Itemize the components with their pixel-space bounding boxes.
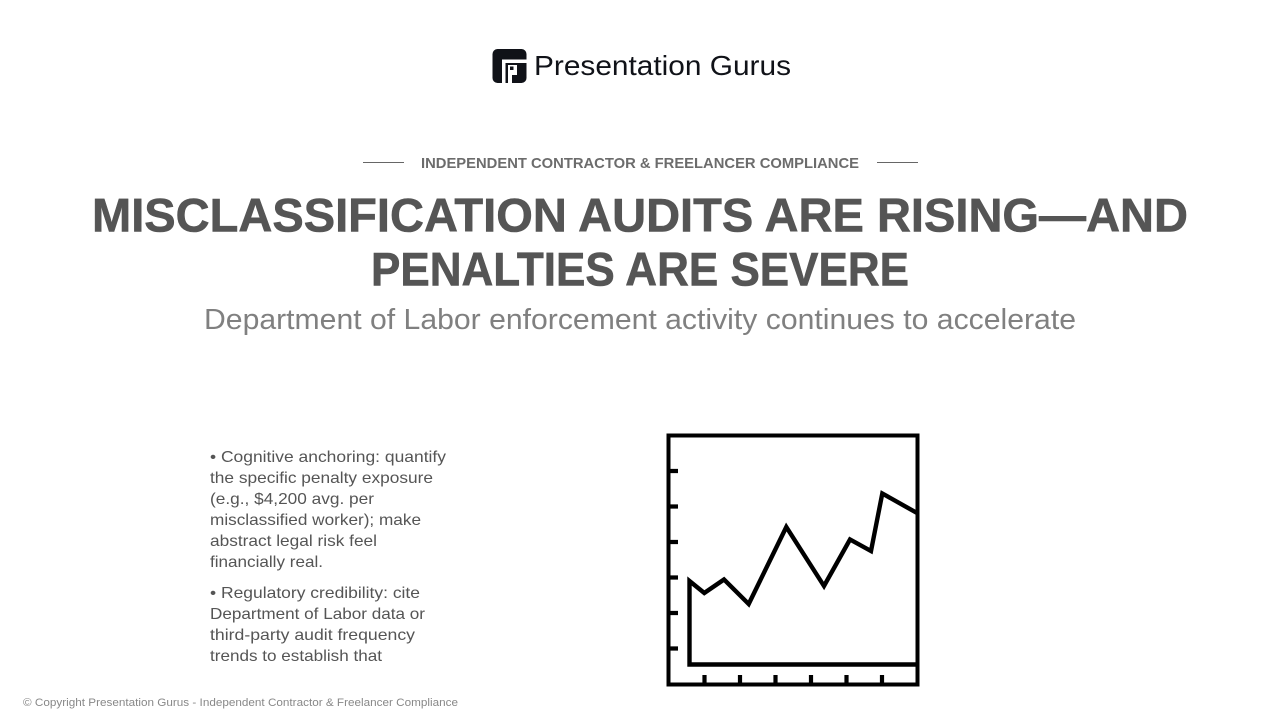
title: PENALTIES ARE SEVERE — [371, 242, 909, 296]
bullet: regulatory credibility: Department of Labor data or — [210, 606, 426, 623]
bullet: cognitive anchoring: (e.g., $4,200 avg. per — [210, 491, 375, 508]
eyebrow heading: INDEPENDENT CONTRACTOR & FREELANCER COMPLIANCE — [421, 155, 859, 172]
bullet: cognitive anchoring: abstract legal risk feel — [210, 533, 377, 550]
logo wordmark: Presentation Gurus — [534, 50, 791, 81]
icon: line chart — [668, 436, 918, 684]
bullet text block — [210, 449, 446, 665]
bullet: regulatory credibility: third-party audit frequency — [210, 627, 415, 644]
title: MISCLASSIFICATION AUDITS ARE RISING—AND — [92, 188, 1188, 242]
subtitle: Department of Labor enforcement activity continues to accelerate — [204, 304, 1076, 336]
title — [92, 188, 1188, 296]
bullet: cognitive anchoring: • Cognitive anchoring: quantify — [210, 449, 446, 466]
bullet: cognitive anchoring: the specific penalty exposure — [210, 470, 433, 487]
logo — [492, 49, 791, 83]
footer copyright: © Copyright Presentation Gurus - Independent Contractor & Freelancer Compliance — [23, 697, 458, 709]
bullet: cognitive anchoring: financially real. — [210, 554, 323, 571]
bullet: regulatory credibility: trends to establish that — [210, 648, 383, 665]
icon: logo mark — [492, 49, 527, 83]
bullet: regulatory credibility: • Regulatory credibility: cite — [210, 585, 420, 602]
bullet: regulatory credibility — [210, 585, 426, 665]
bullet: cognitive anchoring — [210, 449, 446, 571]
bullet: cognitive anchoring: misclassified worker); make — [210, 512, 421, 529]
